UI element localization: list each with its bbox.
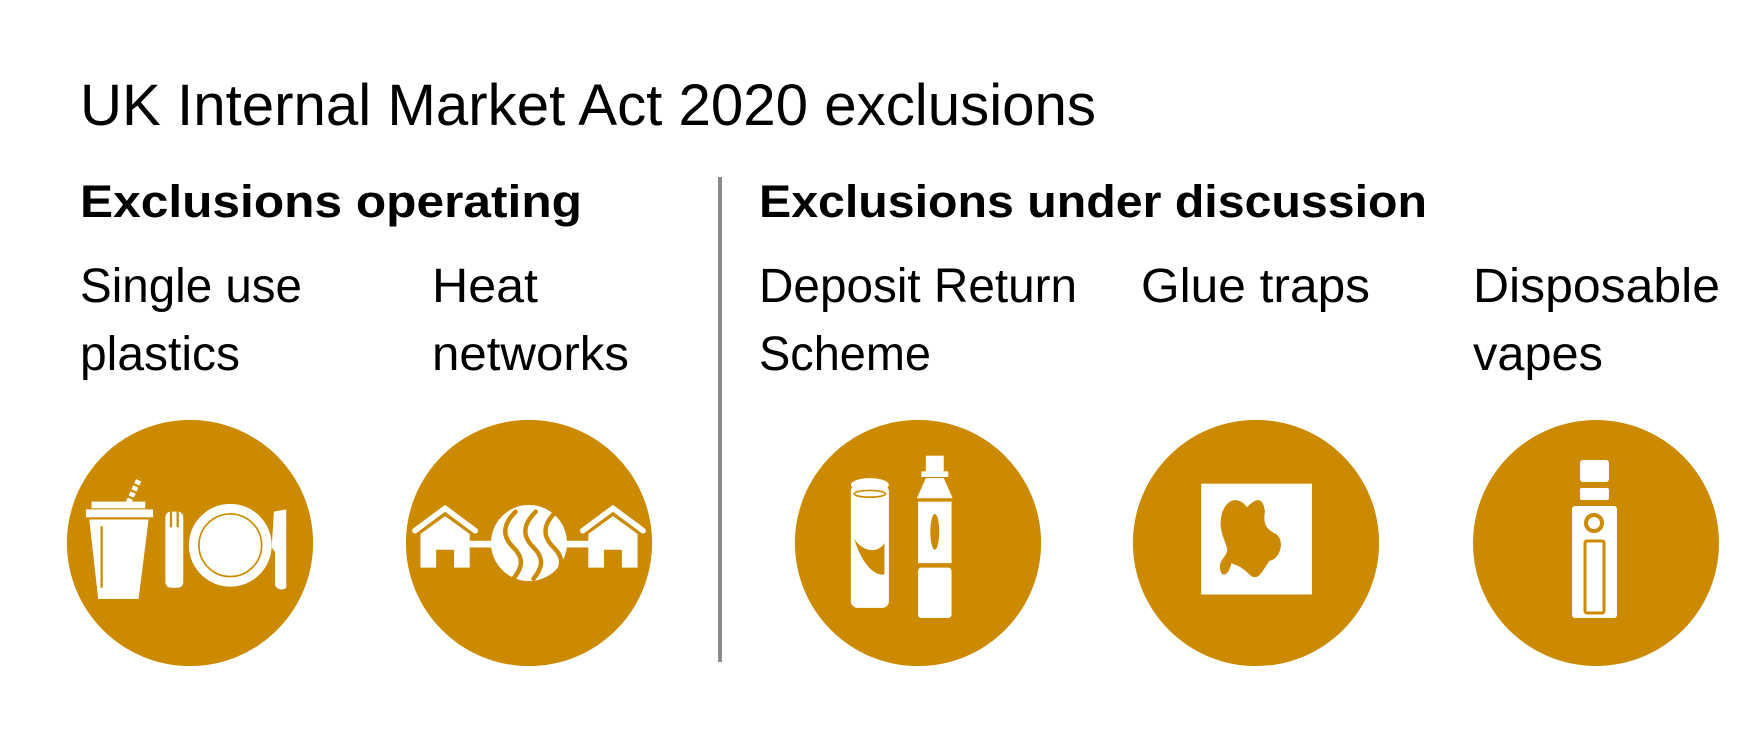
label: disposable vapes xyxy=(1473,260,1720,381)
label: heat networks xyxy=(432,260,629,381)
label: heat networks: Heat xyxy=(432,260,538,313)
label: deposit return scheme xyxy=(759,260,1077,381)
icon: glue traps xyxy=(1133,420,1379,666)
icon: single use plastics xyxy=(67,420,313,666)
heading: exclusions under discussion: Exclusions under discussion xyxy=(759,176,1427,227)
label: glue traps: Glue traps xyxy=(1141,260,1370,313)
icon: heat networks xyxy=(406,420,652,666)
label: single use plastics: Single use xyxy=(80,260,302,313)
label: deposit return scheme: Deposit Return xyxy=(759,260,1077,313)
icon: deposit return scheme xyxy=(795,420,1041,666)
divider xyxy=(718,177,722,662)
heading: exclusions operating: Exclusions operating xyxy=(80,176,582,227)
title: UK Internal Market Act 2020 exclusions xyxy=(80,73,1096,138)
icon: disposable vapes xyxy=(1473,420,1719,666)
label: disposable vapes: Disposable xyxy=(1473,260,1720,313)
label: single use plastics xyxy=(80,260,302,381)
label: heat networks: networks xyxy=(432,328,629,381)
label: deposit return scheme: Scheme xyxy=(759,328,931,381)
label: disposable vapes: vapes xyxy=(1473,328,1603,381)
label: single use plastics: plastics xyxy=(80,328,240,381)
